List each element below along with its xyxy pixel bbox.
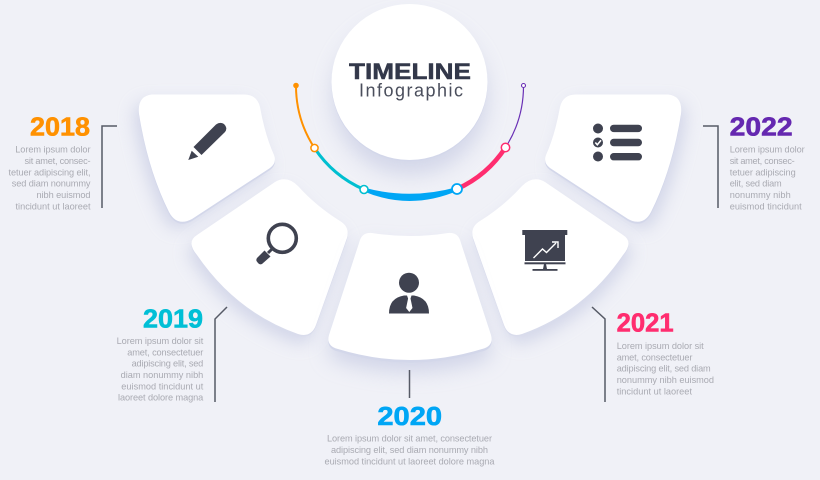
connector 2018 — [102, 126, 117, 208]
timeline arc — [293, 83, 526, 201]
text block: 2018: Lorem ipsum dolor — [15, 145, 90, 155]
text block: 2018: sit amet, consec- — [24, 156, 90, 166]
purple segment — [506, 86, 524, 148]
blue node — [452, 184, 462, 194]
text block: 2021: 2021 — [617, 310, 674, 338]
text block: 2022: 2022 — [730, 114, 793, 142]
teal node — [360, 186, 368, 194]
icon: person — [389, 273, 429, 314]
text block: 2020 — [324, 403, 495, 466]
text block: 2018: 2018 — [30, 114, 90, 142]
text block: 2021: Lorem ipsum dolor sit — [617, 341, 704, 351]
text block: 2020: Lorem ipsum dolor sit amet, consectetuer — [327, 434, 492, 444]
text block: 2022: euismod tincidunt — [730, 201, 802, 211]
text block: 2019: laoreet dolore magna — [118, 393, 204, 403]
text block: 2018: tetuer adipiscing elit, — [8, 167, 90, 177]
text block: 2022: nonummy nibh — [730, 190, 791, 200]
end dot — [522, 84, 526, 88]
text block: 2018: nibh euismod — [36, 190, 90, 200]
subtitle: Infographic — [359, 81, 463, 101]
panel: 2018 card — [134, 94, 275, 229]
text block: 2021: adipiscing elit, sed diam — [617, 364, 711, 374]
text block: 2018: sed diam nonummy — [12, 179, 91, 189]
text block: 2022: sit amet, consec- — [730, 156, 795, 166]
text block: 2019 — [117, 306, 204, 403]
text block: 2018: tincidunt ut laoreet — [16, 201, 91, 211]
text block: 2019: 2019 — [143, 306, 203, 334]
connector 2021 — [592, 307, 605, 402]
text block: 2020: 2020 — [377, 403, 442, 431]
connector 2019 — [215, 307, 227, 402]
start dot — [293, 83, 299, 88]
text block: 2018 — [8, 114, 91, 211]
connector 2020 — [408, 370, 410, 398]
panel: 2020 card — [328, 233, 492, 372]
text block: 2022: Lorem ipsum dolor — [730, 145, 805, 155]
text block: 2019: diam nonummy nibh — [121, 370, 203, 380]
text block: 2019: amet, consectetuer — [127, 347, 203, 357]
panel: 2021 card — [472, 179, 632, 344]
text block: 2020: euismod tincidunt ut laoreet dolore magna — [324, 456, 495, 466]
pink node — [501, 143, 510, 152]
text block: 2021 — [617, 310, 714, 396]
icon: checklist — [593, 124, 642, 162]
blue segment — [363, 187, 458, 201]
icon: magnifier — [256, 224, 296, 264]
title: TIMELINE — [349, 59, 471, 84]
text block: 2019: euismod tincidunt ut — [121, 381, 204, 391]
text block: 2020: adipiscing elit, sed diam nonummy nibh — [331, 445, 488, 455]
text block: 2019: Lorem ipsum dolor sit — [117, 336, 204, 346]
panel: title circle — [332, 4, 488, 175]
orange node — [311, 144, 318, 152]
orange segment — [296, 86, 314, 148]
panel: 2022 card — [545, 94, 686, 229]
panel: 2019 card — [188, 179, 348, 344]
icon: pencil — [188, 123, 226, 160]
text block: 2019: adipiscing elit, sed — [132, 359, 203, 369]
connector 2022 — [703, 126, 718, 208]
teal segment — [314, 148, 364, 190]
icon: presentation board — [522, 230, 567, 271]
text block: 2021: tincidunt ut laoreet — [617, 386, 692, 396]
pink segment — [457, 148, 506, 189]
text block: 2021: nonummy nibh euismod — [617, 375, 714, 385]
text block: 2021: amet, consectetuer — [617, 352, 692, 362]
text block: 2022: elit, sed diam — [730, 179, 782, 189]
text block: 2022 — [730, 114, 805, 211]
text block: 2022: tetuer adipiscing — [730, 167, 796, 177]
